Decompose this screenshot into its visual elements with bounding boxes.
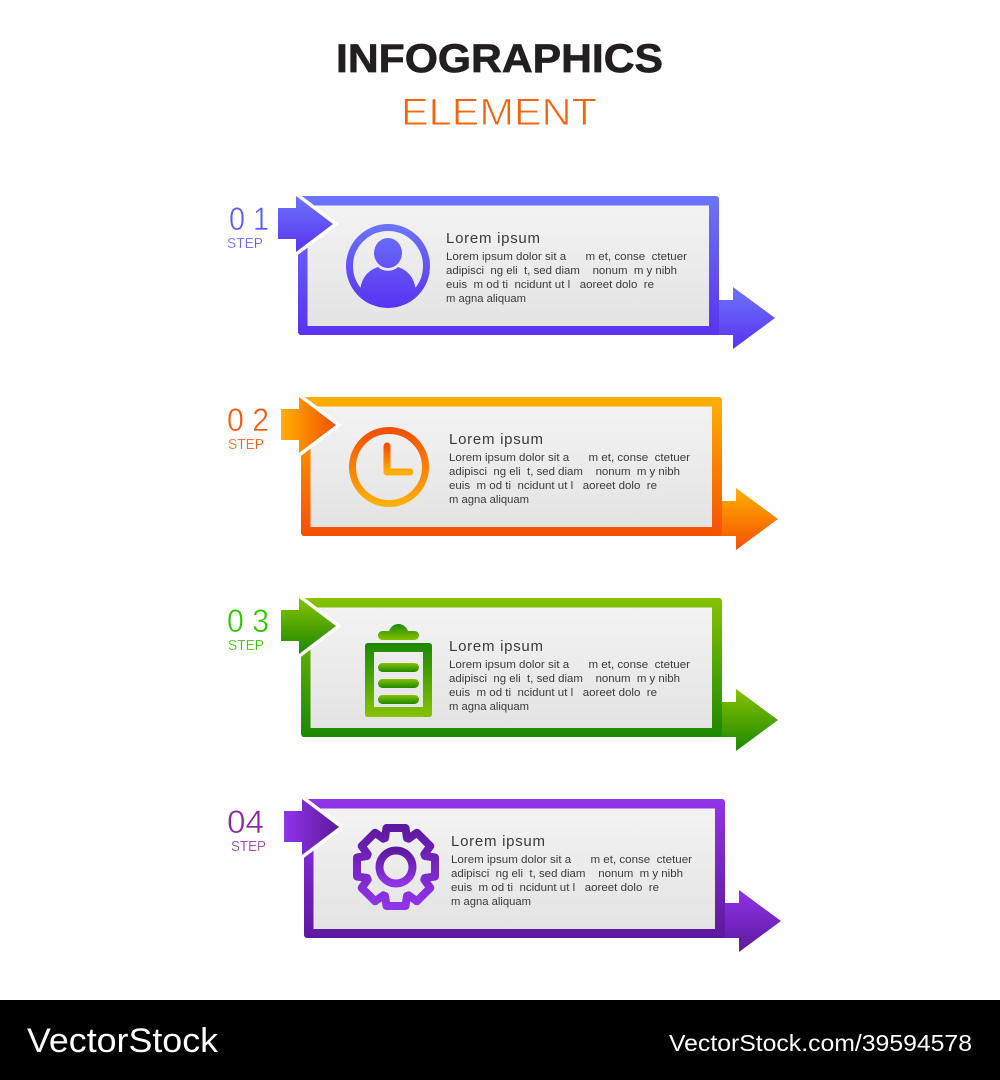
- step 4 frame: [304, 799, 725, 938]
- step 2 number label: STEP: [228, 436, 264, 453]
- arrow: step 1 input: [278, 196, 333, 252]
- arrow: step 3 output: [708, 689, 778, 751]
- arrow: step 1 output: [705, 287, 775, 349]
- footer image id: VectorStock.com/39594578: [669, 1030, 972, 1056]
- step 1 text: Lorem ipsum: [446, 230, 540, 247]
- step 1 frame: [298, 196, 719, 335]
- title: INFOGRAPHICS: [336, 37, 663, 81]
- panel: step 2: [227, 397, 778, 550]
- step 2 number label: 0 2: [227, 402, 269, 438]
- icon: clock: [352, 430, 426, 504]
- step 1 number label: 0 1: [229, 201, 269, 237]
- footer logo text: VectorStock: [27, 1022, 219, 1060]
- step 3 number label: 0 3: [227, 603, 269, 639]
- step 4 text: [451, 833, 692, 908]
- step 1 text: euis m od ti ncidunt ut l aoreet dolo re: [446, 279, 654, 291]
- step 4 text: Lorem ipsum: [451, 833, 545, 850]
- step 2 frame: [301, 397, 722, 536]
- step 2 text: Lorem ipsum: [449, 431, 543, 448]
- step 3 text: Lorem ipsum dolor sit a m et, conse ctetuer: [449, 659, 690, 671]
- title: ELEMENT: [401, 92, 597, 134]
- step 4 number label: STEP: [231, 838, 266, 855]
- step 3 text: [449, 638, 690, 713]
- step 3 text: euis m od ti ncidunt ut l aoreet dolo re: [449, 687, 657, 699]
- arrow: step 2 input: [281, 397, 336, 453]
- arrow: step 3 input: [281, 598, 336, 654]
- arrow: step 2 output: [708, 488, 778, 550]
- step 4 number label: [227, 804, 266, 855]
- arrow: step 4 input: [284, 799, 339, 855]
- step 1 text: [446, 230, 687, 305]
- step 3 number label: STEP: [228, 637, 264, 654]
- arrow: step 4 output: [711, 890, 781, 952]
- panel: step 4: [227, 799, 781, 952]
- step 3 number label: [227, 603, 269, 654]
- step 2 number label: [227, 402, 269, 453]
- icon: person: [350, 228, 426, 306]
- title: [336, 37, 663, 134]
- step 2 text: euis m od ti ncidunt ut l aoreet dolo re: [449, 480, 657, 492]
- step 3 text: m agna aliquam: [449, 701, 529, 713]
- step 2 text: m agna aliquam: [449, 494, 529, 506]
- step 1 number label: STEP: [227, 235, 263, 252]
- step 3 text: adipisci ng eli t, sed diam nonum m y nibh: [449, 673, 680, 685]
- icon: gear: [357, 828, 435, 906]
- footer bar: [0, 1000, 1000, 1080]
- step 2 text: Lorem ipsum dolor sit a m et, conse ctetuer: [449, 452, 690, 464]
- step 2 text: [449, 431, 690, 506]
- step 1 text: m agna aliquam: [446, 293, 526, 305]
- step 3 text: Lorem ipsum: [449, 638, 543, 655]
- panel: step 1: [227, 196, 775, 349]
- step 1 text: adipisci ng eli t, sed diam nonum m y nibh: [446, 265, 677, 277]
- step 4 text: euis m od ti ncidunt ut l aoreet dolo re: [451, 882, 659, 894]
- step 1 number label: [227, 201, 269, 252]
- step 4 text: adipisci ng eli t, sed diam nonum m y nibh: [451, 868, 683, 880]
- step 4 text: Lorem ipsum dolor sit a m et, conse ctetuer: [451, 854, 692, 866]
- step 4 text: m agna aliquam: [451, 896, 531, 908]
- panel: step 3: [227, 598, 778, 751]
- step 4 number label: 04: [227, 804, 264, 840]
- step 1 text: Lorem ipsum dolor sit a m et, conse ctetuer: [446, 251, 687, 263]
- step 3 frame: [301, 598, 722, 737]
- icon: clipboard: [365, 624, 432, 717]
- step 2 text: adipisci ng eli t, sed diam nonum m y nibh: [449, 466, 680, 478]
